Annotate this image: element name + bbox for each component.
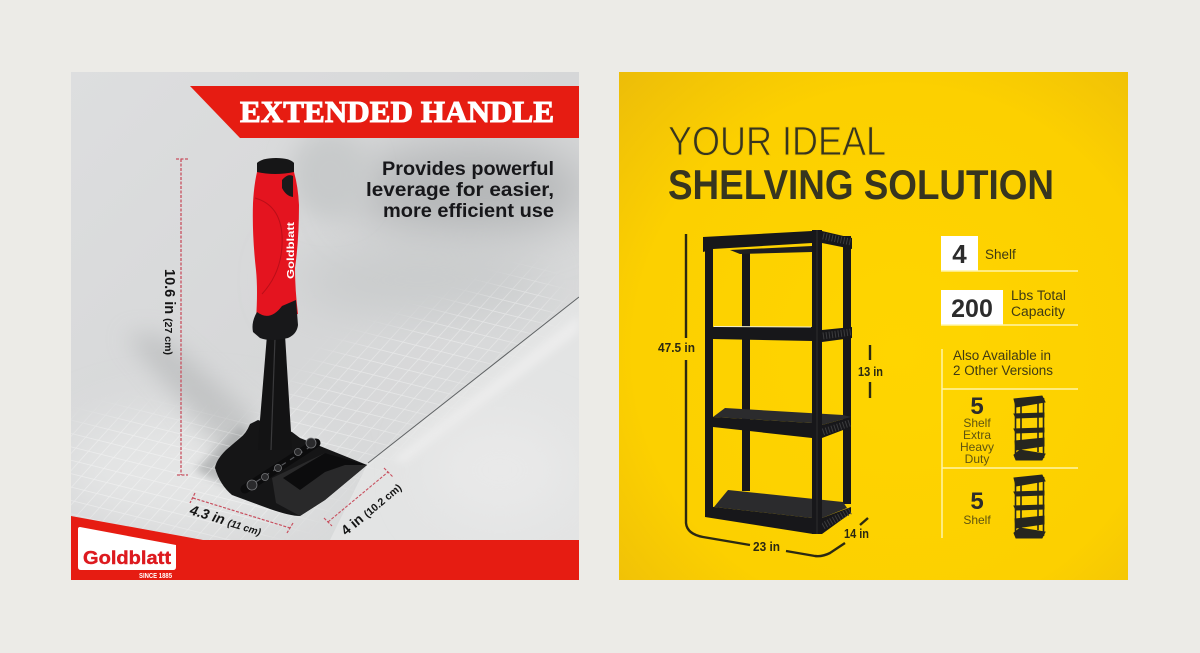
also available text <box>953 348 1053 378</box>
third shelf <box>705 408 851 438</box>
description text: Provides powerful <box>382 159 554 180</box>
top shelf <box>703 231 852 254</box>
version: 5 shelf extra heavy duty: Shelf <box>963 416 991 430</box>
floor mesh texture <box>71 278 552 540</box>
spec: 4 shelf: Shelf <box>985 247 1016 262</box>
spec: 200 lbs total capacity <box>941 288 1078 325</box>
spec: 200 lbs total capacity: Lbs Total <box>1011 288 1066 303</box>
bottom shelf <box>705 490 851 534</box>
height dimension: 10.6 in: 10.6 in (27 cm) <box>161 269 177 355</box>
version: 5 shelf extra heavy duty: Heavy <box>960 440 994 454</box>
red footer band <box>71 516 579 580</box>
spec: 200 lbs total capacity: 200 <box>951 295 993 323</box>
banner: extended handle heading <box>190 86 579 138</box>
description text: leverage for easier, <box>366 180 554 201</box>
tool: blade <box>215 420 367 516</box>
version: 5 shelf extra heavy duty: 5 <box>970 393 984 420</box>
panel: shelving solution <box>619 72 1128 580</box>
spec: 200 lbs total capacity: Capacity <box>1011 304 1065 319</box>
heading: your ideal shelving solution: SHELVING SOLUTION <box>668 161 1054 208</box>
front posts <box>705 230 822 534</box>
depth dimension: 4 in: 4 in (10.2 cm) <box>338 479 404 538</box>
description text: more efficient use <box>383 201 554 222</box>
panel: extended handle <box>60 72 590 580</box>
dimension labels <box>658 341 883 554</box>
other versions list <box>942 348 1078 538</box>
version: 5 shelf extra heavy duty: Extra <box>963 428 991 442</box>
dimension labels: 23 in <box>753 540 780 554</box>
brand logo: Goldblatt: SINCE 1885 <box>139 571 172 580</box>
dimension lines <box>686 234 870 556</box>
version: 5 shelf: 5 <box>970 488 984 515</box>
heading: your ideal shelving solution <box>668 118 1054 208</box>
heading: your ideal shelving solution: YOUR IDEAL <box>668 118 886 164</box>
back posts <box>742 236 851 504</box>
version: 5 shelf: Shelf <box>963 513 991 527</box>
width dimension: 4.3 in <box>187 493 293 539</box>
also available text: Also Available in <box>953 348 1051 363</box>
second shelf <box>705 326 852 342</box>
icon: five shelf unit <box>1014 475 1045 538</box>
brand logo: Goldblatt <box>78 527 176 580</box>
infographic canvas <box>71 72 1128 580</box>
width dimension: 4.3 in: 4.3 in (11 cm) <box>187 501 264 539</box>
version: 5 shelf extra heavy duty <box>960 393 994 466</box>
dimension labels: 13 in <box>858 365 883 379</box>
banner: extended handle heading: EXTENDED HANDLE <box>240 94 554 129</box>
height dimension: 10.6 in <box>161 159 188 475</box>
brand logo: Goldblatt: Goldblatt <box>83 547 171 568</box>
tool: handle: Goldblatt <box>285 221 297 279</box>
version: 5 shelf <box>963 488 991 527</box>
tool: handle <box>252 158 299 450</box>
depth dimension: 4 in <box>324 468 404 538</box>
version: 5 shelf extra heavy duty: Duty <box>965 452 989 466</box>
icon: five shelf extra heavy unit <box>1014 396 1045 460</box>
description text <box>367 161 554 217</box>
dimension labels: 47.5 in <box>658 341 695 355</box>
product: four shelf unit <box>703 230 852 534</box>
blade hinge and rivets <box>245 438 316 490</box>
also available text: 2 Other Versions <box>953 363 1053 378</box>
dimension labels: 14 in <box>844 527 869 541</box>
spec: 4 shelf <box>941 236 1078 271</box>
spec: 4 shelf: 4 <box>952 239 967 269</box>
